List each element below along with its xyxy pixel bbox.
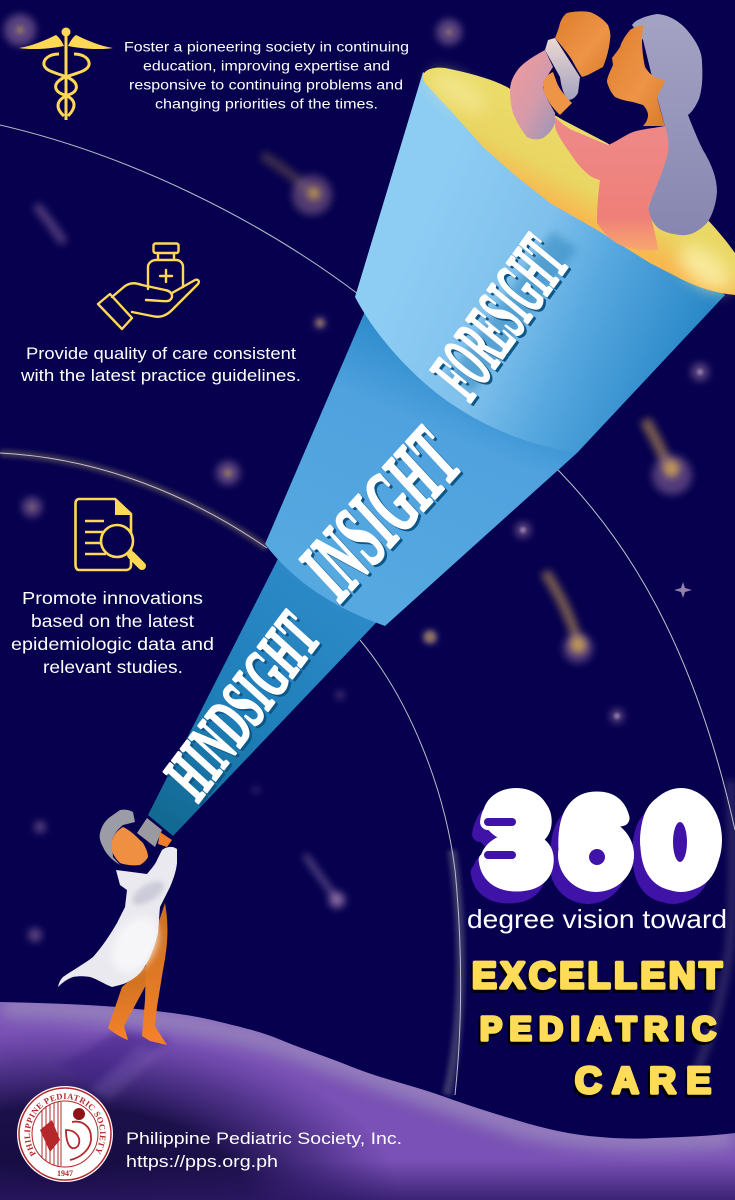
label: HINDSIGHT bbox=[149, 600, 339, 815]
label: HINDSIGHT: HINDSIGHT bbox=[149, 600, 336, 813]
headline: excellent pediatric care: EXCELLENT bbox=[472, 955, 722, 996]
mother's hair bbox=[632, 14, 717, 235]
text: with the latest practice guidelines. bbox=[20, 367, 301, 385]
text bbox=[11, 588, 214, 677]
text: based on the latest bbox=[31, 611, 194, 631]
segment: hindsight tube bbox=[148, 545, 392, 836]
mother's face and neck bbox=[607, 25, 665, 126]
mission 3 bbox=[11, 498, 214, 677]
headline: 360: 3 bbox=[476, 788, 542, 920]
star field bbox=[4, 14, 709, 942]
hill bbox=[0, 1000, 735, 1200]
eyepiece bbox=[137, 818, 162, 847]
text: responsive to continuing problems and bbox=[129, 78, 403, 92]
sparkle star bbox=[674, 582, 692, 598]
logo: Philippine Pediatric Society seal: 1947 bbox=[57, 1169, 73, 1178]
headline: 360 bbox=[472, 776, 722, 920]
text: relevant studies. bbox=[43, 657, 183, 677]
text: Foster a pioneering society in continuing bbox=[124, 40, 409, 54]
mother's dress bbox=[555, 117, 668, 251]
headline: 360: 6 bbox=[554, 788, 620, 920]
headline: 360: 3 bbox=[484, 776, 550, 908]
headline: excellent pediatric care: CARE bbox=[575, 1060, 711, 1101]
icon: document with magnifier bbox=[76, 498, 142, 570]
headline: excellent pediatric care: PEDIATRIC bbox=[478, 1013, 714, 1050]
segment: foresight tube bbox=[355, 72, 725, 453]
hand bbox=[158, 832, 172, 847]
label: FORESIGHT bbox=[413, 221, 588, 415]
label: INSIGHT: INSIGHT bbox=[281, 411, 481, 617]
baby's head bbox=[555, 11, 610, 77]
telescope bbox=[137, 63, 735, 847]
text: epidemiologic data and bbox=[11, 634, 214, 654]
baby's collar bbox=[545, 38, 580, 100]
logo: Philippine Pediatric Society seal: PHILIPPINE PEDIATRIC SOCIETY bbox=[24, 1093, 106, 1157]
headline: excellent pediatric care: PEDIATRIC bbox=[480, 1010, 716, 1047]
headline: 360: 0 bbox=[644, 776, 717, 908]
headline: 360: 0 bbox=[636, 788, 709, 920]
headline: excellent pediatric care: CARE bbox=[573, 1063, 709, 1104]
text: changing priorities of the times. bbox=[155, 96, 378, 112]
mother and baby bbox=[510, 11, 717, 251]
label: HINDSIGHT: HINDSIGHT bbox=[151, 602, 339, 815]
text bbox=[20, 345, 301, 385]
subheading: degree vision toward bbox=[467, 904, 727, 934]
footer text: Philippine Pediatric Society, Inc. bbox=[126, 1129, 402, 1148]
text: education, improving expertise and bbox=[143, 58, 390, 74]
icon: hand holding bottle bbox=[98, 244, 199, 329]
label: INSIGHT: INSIGHT bbox=[284, 413, 483, 619]
logo: Philippine Pediatric Society seal bbox=[17, 1086, 113, 1182]
face bbox=[112, 827, 148, 865]
foresight glow bbox=[460, 240, 565, 385]
baby's body bbox=[510, 50, 555, 139]
comets bbox=[36, 155, 692, 908]
mission 2 bbox=[20, 244, 301, 385]
mission 1 bbox=[19, 28, 409, 120]
text: Promote innovations bbox=[22, 588, 203, 608]
headline: 360: 6 bbox=[562, 776, 628, 908]
segment: insight tube bbox=[265, 295, 577, 626]
footer text bbox=[126, 1129, 402, 1171]
lab coat bbox=[58, 847, 177, 987]
headline: excellent pediatric care: EXCELLENT bbox=[470, 958, 720, 999]
text bbox=[124, 40, 409, 112]
label: INSIGHT bbox=[281, 411, 483, 619]
bell rim bbox=[423, 63, 735, 299]
footer text: https://pps.org.ph bbox=[126, 1152, 278, 1171]
doctor bbox=[58, 810, 177, 1045]
text: Provide quality of care consistent bbox=[26, 345, 296, 363]
icon: caduceus bbox=[19, 28, 113, 120]
hair bbox=[100, 810, 135, 865]
legs bbox=[108, 903, 167, 1045]
headline: excellent pediatric care bbox=[470, 955, 722, 1104]
mother's hand bbox=[543, 72, 572, 115]
